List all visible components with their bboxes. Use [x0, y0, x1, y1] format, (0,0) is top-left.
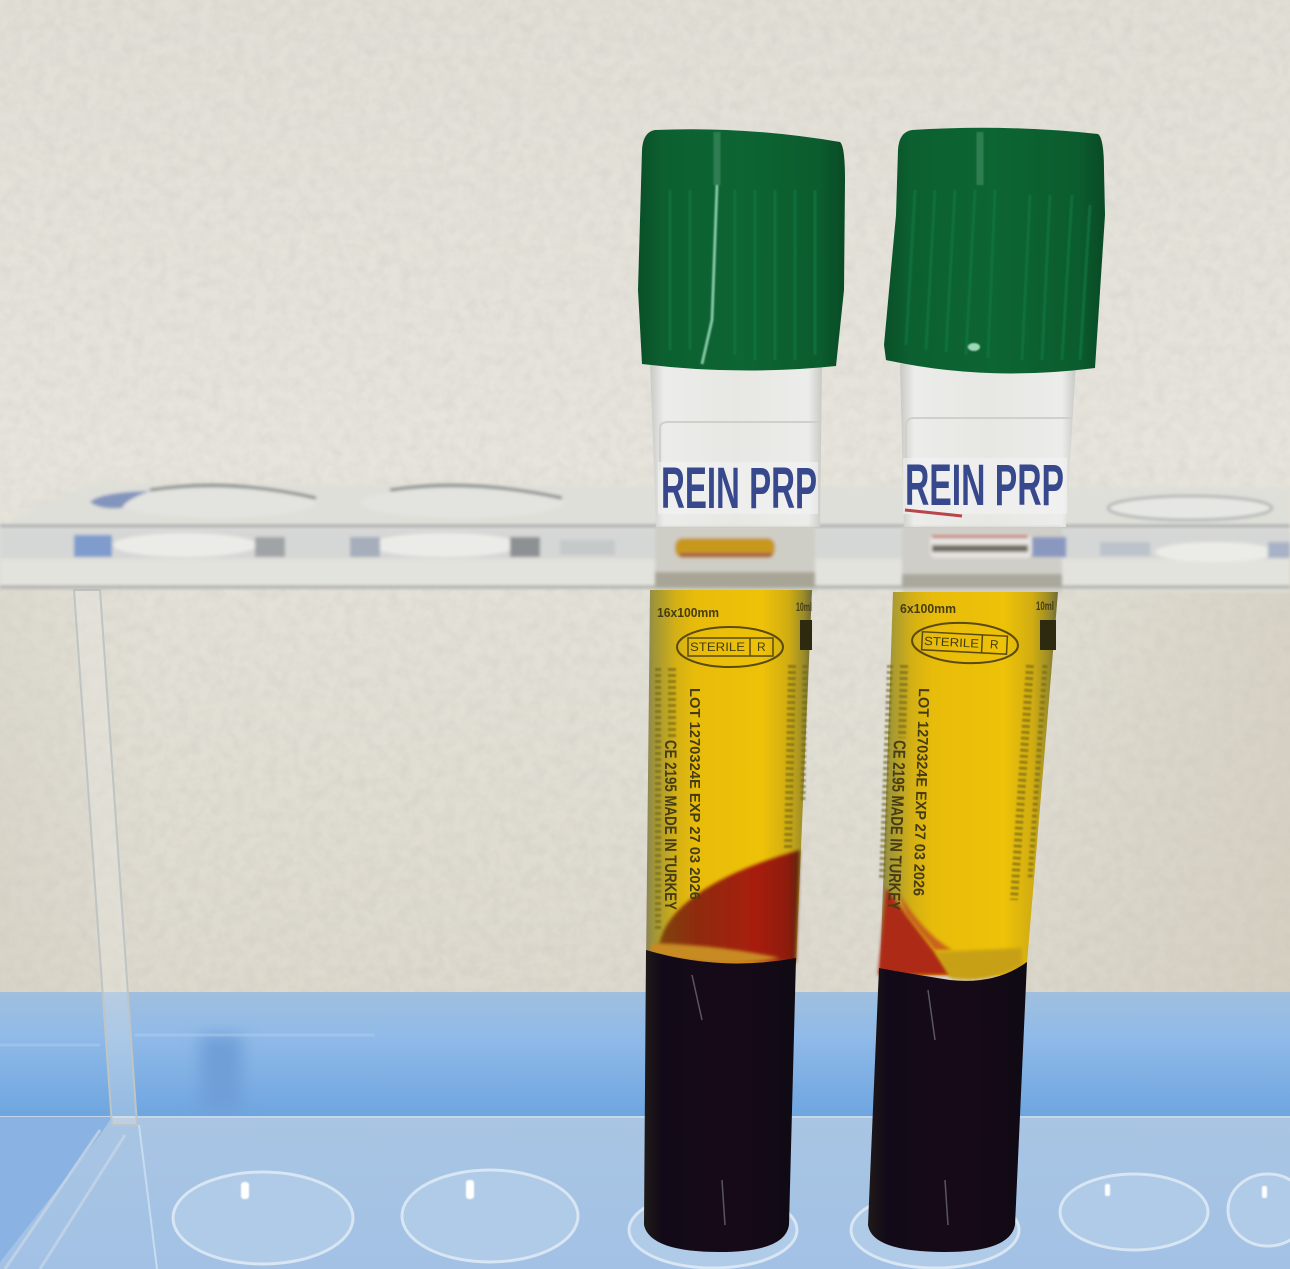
rack: clear acrylic legs	[74, 590, 137, 1125]
tube 1: blood	[644, 950, 796, 1252]
tube 2: printed text: 10ml	[1036, 599, 1054, 613]
tube 2: faint label edge	[906, 418, 1072, 465]
tube 2: amber band	[935, 948, 1022, 980]
tube 1: neck	[655, 527, 815, 592]
tube 1: printed text: STERILE	[690, 640, 745, 654]
tube 2	[868, 128, 1105, 1252]
tube 1: printed text: LOT 1270324E EXP 27 03 2026	[686, 688, 703, 900]
tube 1: plasma	[646, 590, 812, 965]
background: wall	[0, 0, 1290, 1000]
tube 1: small print marks	[658, 665, 805, 930]
tube 1: printed text: 16x100mm	[657, 605, 719, 620]
tube 1: printed text: 10ml	[796, 600, 812, 614]
tube 1: printed text: R	[757, 640, 766, 654]
tube 1	[638, 129, 845, 1252]
tray wells	[173, 1170, 1290, 1268]
tube 2: white label band	[903, 458, 1067, 514]
tube 2: label: REIN PRP	[905, 453, 1064, 518]
tube 2: printed text: R	[990, 637, 999, 652]
tube 2: red cell layer	[878, 888, 952, 975]
tube 1: highlights	[692, 975, 725, 1225]
tube 2: green cap	[884, 128, 1105, 373]
tube 2: printed text: LOT 1270324E EXP 27 03 2026	[910, 688, 932, 896]
tube 2: printed text	[884, 599, 1056, 911]
tube 2: neck	[902, 527, 1066, 594]
well highlights	[241, 1180, 1267, 1199]
tube 2: highlights	[928, 990, 948, 1225]
tube 1: amber band	[650, 943, 780, 963]
tube 1: clear collar	[650, 362, 822, 527]
tube 2: small print marks	[882, 665, 1045, 900]
tube 1: label: REIN PRP	[661, 456, 817, 521]
tube 1: green cap	[638, 129, 845, 371]
tube 1: printed text: CE 2195 MADE IN TURKEY	[661, 740, 680, 911]
tube 1: faint label edge	[660, 422, 820, 470]
blue tray	[0, 992, 1290, 1269]
tube 2: orange wedge	[898, 892, 952, 950]
tube 1: printed text	[657, 600, 812, 911]
rack: top shelf	[0, 484, 1290, 592]
tube 2: printed text: STERILE	[924, 634, 979, 651]
tube 2: plasma	[880, 592, 1058, 975]
tube 2: cap ribs and shine	[906, 132, 1090, 360]
tube 1: white label band	[658, 462, 818, 514]
tube 1: red cell layer	[650, 850, 800, 962]
tube 2: red stripe	[905, 510, 962, 516]
tube 2: clear collar	[900, 364, 1076, 527]
tube 2: blood	[868, 962, 1027, 1252]
tube 2: printed text: CE 2195 MADE IN TURKEY	[884, 740, 909, 911]
tube 1: cap ribs and shine	[670, 132, 815, 364]
tube 2: printed text: 6x100mm	[900, 601, 956, 616]
